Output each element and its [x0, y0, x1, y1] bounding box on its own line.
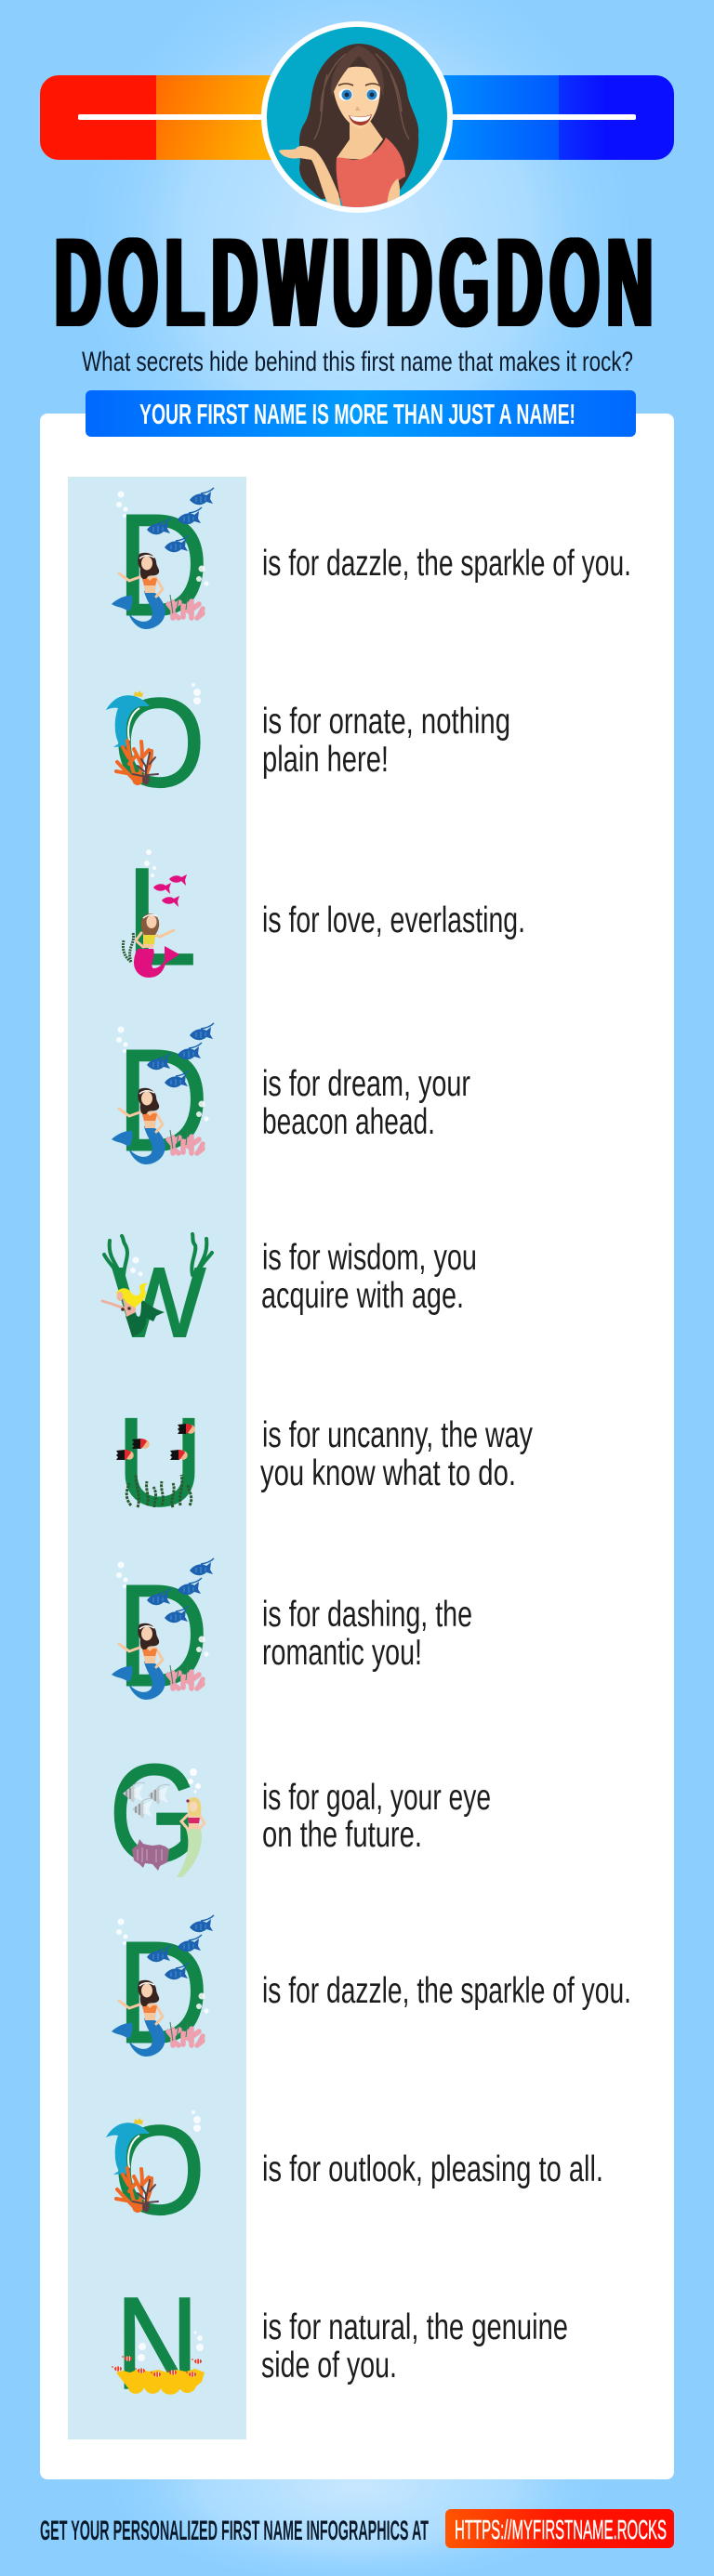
letter G: goal — [109, 1735, 491, 1891]
letter U: uncanny — [116, 1391, 533, 1532]
letter U: uncanny: U — [116, 1391, 204, 1532]
letter W: wisdom — [102, 1234, 477, 1358]
letter O: outlook — [106, 2099, 603, 2241]
letter D: dazzle — [112, 484, 631, 647]
letter O: ornate: plain here! — [262, 740, 389, 780]
letter U: uncanny: is for uncanny, the way — [262, 1415, 533, 1455]
letter D: dazzle (second): D — [116, 1912, 209, 2074]
letter U: uncanny: you know what to do. — [260, 1453, 516, 1493]
letter L: love — [123, 838, 525, 994]
letter column background — [68, 477, 246, 2439]
avatar portrait — [261, 21, 453, 213]
letter W: wisdom: is for wisdom, you — [262, 1238, 477, 1278]
title: name: DOLDWUDGDON — [55, 212, 660, 354]
letter D: dashing: romantic you! — [262, 1633, 422, 1673]
letter N: natural: side of you. — [261, 2346, 397, 2385]
letter D: dashing: is for dashing, the — [262, 1595, 472, 1635]
letter D: dream: beacon ahead. — [262, 1102, 435, 1142]
letter D: dream — [112, 1019, 470, 1182]
letter G: goal: on the future. — [262, 1815, 422, 1855]
letter W: wisdom: acquire with age. — [261, 1276, 464, 1316]
letter G: goal: is for goal, your eye — [262, 1778, 491, 1818]
letter D: dream: D — [116, 1019, 209, 1182]
letter O: ornate: O — [113, 672, 205, 813]
letter O: outlook: O — [113, 2099, 205, 2241]
letter L: love: L — [126, 838, 197, 994]
letter G: goal: G — [109, 1735, 200, 1891]
letter W: wisdom: W — [112, 1248, 205, 1358]
letter N: natural — [112, 2269, 568, 2416]
banner — [86, 390, 636, 437]
letter D: dashing: D — [116, 1555, 209, 1717]
letter D: dream: is for dream, your — [262, 1064, 470, 1104]
letter D: dashing — [112, 1555, 472, 1717]
footer url button — [445, 2509, 674, 2548]
letter N: natural: is for natural, the genuine — [262, 2307, 568, 2347]
letter O: ornate — [106, 672, 510, 813]
letter D: dazzle: D — [116, 484, 209, 647]
letter O: ornate: is for ornate, nothing — [262, 702, 510, 742]
letter N: natural: N — [115, 2269, 199, 2416]
header ribbon: warm left, cool right — [40, 75, 674, 160]
letter L: love: is for love, everlasting. — [262, 900, 525, 940]
letter O: outlook: is for outlook, pleasing to all. — [262, 2149, 603, 2189]
letter D: dazzle (second) — [112, 1912, 631, 2074]
results panel — [40, 414, 674, 2479]
